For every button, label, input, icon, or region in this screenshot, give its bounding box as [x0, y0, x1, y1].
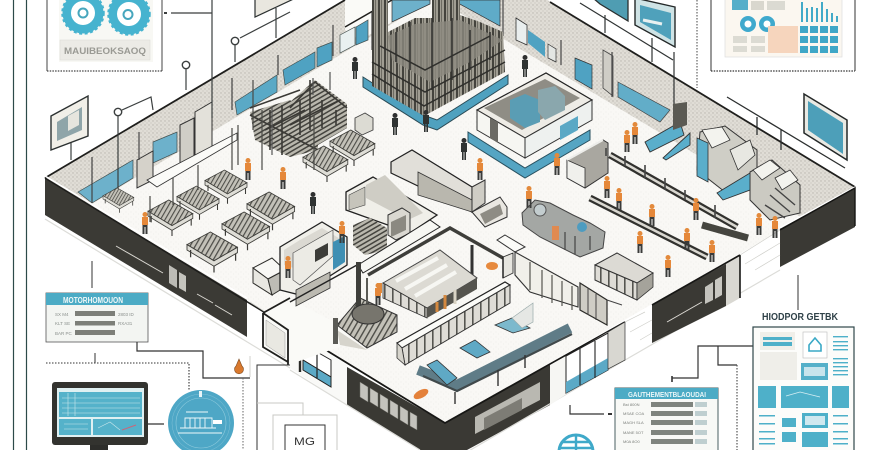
bar chart	[801, 2, 838, 22]
bottom-left connectors	[46, 342, 250, 450]
top right wall screens	[580, 0, 697, 115]
monitor	[52, 382, 148, 450]
booth	[580, 283, 622, 325]
cooling rack	[383, 250, 477, 318]
panel: top-right dashboard	[711, 0, 855, 71]
icon: globe	[559, 435, 593, 450]
caption bar: MAUIBEOKSAOQ	[64, 46, 146, 56]
callout connectors top-left	[71, 0, 290, 200]
panel: lower status table: MSAE COA	[623, 411, 644, 416]
large frame room	[358, 220, 525, 318]
left front wall	[45, 176, 290, 368]
room near front-left corner	[263, 298, 350, 365]
panel: bottom-left status card: BAR PC	[55, 331, 73, 336]
circular factory badge	[168, 390, 234, 450]
blue tile grid	[800, 26, 838, 53]
panel: right report sheet	[753, 327, 854, 450]
grey block	[567, 140, 608, 188]
right wall rail and screen	[727, 94, 847, 168]
panel: bottom-left status card: SX M4	[55, 312, 69, 317]
front centre wall with windows	[290, 270, 780, 450]
back right wall	[392, 0, 855, 218]
panel: lower status table: M0A 8O0	[623, 439, 640, 444]
wall columns and drop lines	[150, 80, 314, 222]
floor	[90, 0, 802, 423]
peach table	[768, 26, 798, 53]
upper left rig	[250, 72, 347, 157]
blue room with tanks	[468, 73, 592, 178]
orange barrow	[486, 262, 498, 270]
tank cluster	[522, 200, 605, 257]
cube machine	[253, 258, 285, 295]
left bed machines	[103, 130, 375, 272]
icon: house tag	[809, 338, 821, 351]
small block beside rig	[355, 113, 373, 135]
panel: bottom-left status card: 2803 ID	[118, 312, 135, 317]
heading: report title: HIODPOR GETBK	[762, 312, 839, 323]
bottom-right connectors	[570, 275, 798, 450]
front right window block	[550, 322, 625, 405]
right cabinets	[515, 252, 578, 310]
panel: lower status table: Bst 800N	[623, 402, 640, 407]
central refinery machine	[363, 0, 508, 130]
icon: orange bulb	[235, 359, 244, 374]
right conveyors	[590, 148, 748, 257]
panel: lower status table: MAGH SLA	[623, 420, 644, 425]
icon: dashboard rings	[740, 16, 775, 32]
right front wall	[652, 255, 740, 343]
icon: left gear	[62, 0, 104, 34]
panel: lower status table: GAUTHEMENTBLAOUDAI	[628, 390, 706, 399]
back left wall	[45, 0, 447, 205]
glass machine	[595, 253, 653, 300]
small wall screen left	[51, 96, 88, 150]
panel: top-left gears	[47, 0, 162, 71]
icon: right gear	[108, 0, 150, 34]
far right front wall	[780, 187, 855, 267]
grey table	[733, 36, 765, 52]
panel: bottom-left status card	[46, 261, 148, 342]
workers	[142, 55, 778, 305]
long cabinet	[397, 282, 510, 365]
panel: bottom-centre document stack	[257, 365, 337, 450]
grey partition room upper	[391, 150, 507, 227]
top screen	[255, 0, 300, 17]
panel: bottom-left status card: RXA31	[118, 321, 133, 326]
panel: bottom-centre document stack: MG	[294, 436, 315, 448]
mid room with grey box	[346, 175, 437, 255]
ground hatching at openings	[250, 230, 780, 340]
panel: bottom-left status card: KLT SE	[55, 321, 70, 326]
drill machine	[333, 262, 397, 350]
left frame rules	[14, 0, 26, 450]
lower room with blue panel	[280, 222, 357, 306]
panel: lower status table	[615, 388, 718, 450]
panel: bottom-left status card: MOTORHOMOUON	[63, 296, 123, 305]
panel: lower status table: MANE 5OT	[623, 430, 644, 435]
right blue panel machines	[645, 102, 800, 220]
conveyor line	[412, 303, 572, 404]
